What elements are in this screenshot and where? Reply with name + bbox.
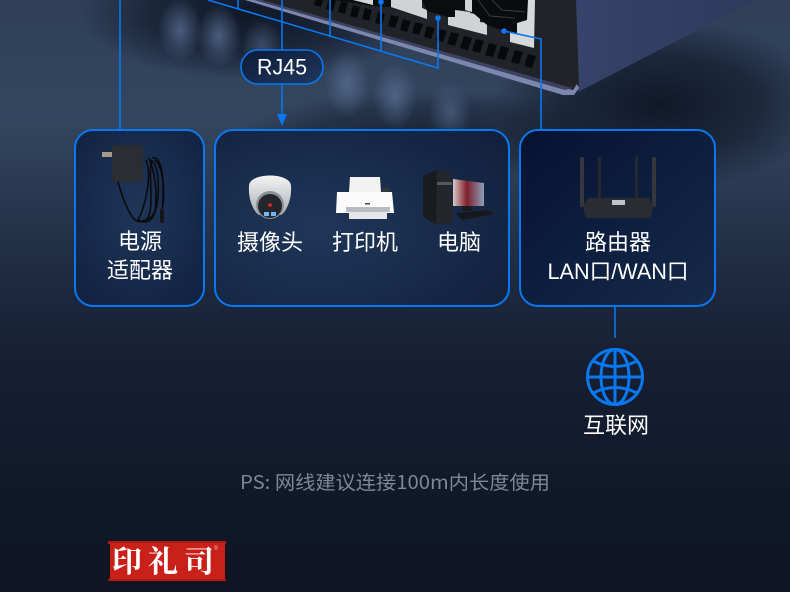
connection lines bbox=[120, 0, 615, 338]
panel: router bbox=[520, 130, 715, 306]
panel: RJ45 devices bbox=[215, 130, 509, 306]
labels bbox=[237, 230, 481, 255]
icon: desktop computer bbox=[423, 170, 495, 225]
label: LAN口/WAN口 bbox=[548, 259, 688, 284]
brand logo: ® bbox=[214, 545, 219, 552]
labels: 电脑 bbox=[437, 230, 481, 255]
device front panel bbox=[245, 0, 579, 95]
icon: printer bbox=[336, 177, 394, 219]
RJ45 pill label: RJ45 bbox=[257, 54, 307, 80]
icon: router bbox=[580, 156, 656, 218]
device side face bbox=[576, 0, 756, 92]
ethernet ports bbox=[335, 0, 535, 48]
icon: camera bbox=[249, 176, 291, 219]
internet label: 互联网 bbox=[583, 413, 649, 438]
label: 电源 bbox=[118, 229, 162, 254]
brand logo: 印礼司 bbox=[112, 537, 220, 581]
ventilation slots bbox=[314, 0, 536, 68]
arrow: RJ45 down to devices bbox=[277, 114, 287, 126]
icon: globe bbox=[588, 350, 642, 404]
label bbox=[548, 230, 688, 284]
panel: power adapter bbox=[75, 130, 204, 306]
label: 适配器 bbox=[107, 258, 173, 283]
label bbox=[107, 229, 173, 283]
RJ45 pill label bbox=[241, 50, 323, 84]
switch device bbox=[245, 0, 756, 95]
labels: 摄像头 bbox=[237, 230, 303, 255]
metal edge strip bbox=[245, 0, 579, 95]
label: 路由器 bbox=[585, 230, 651, 255]
footnote: PS: 网线建议连接100m内长度使用 bbox=[240, 468, 550, 495]
labels: 打印机 bbox=[332, 230, 398, 255]
icon: power adapter bbox=[102, 145, 164, 223]
